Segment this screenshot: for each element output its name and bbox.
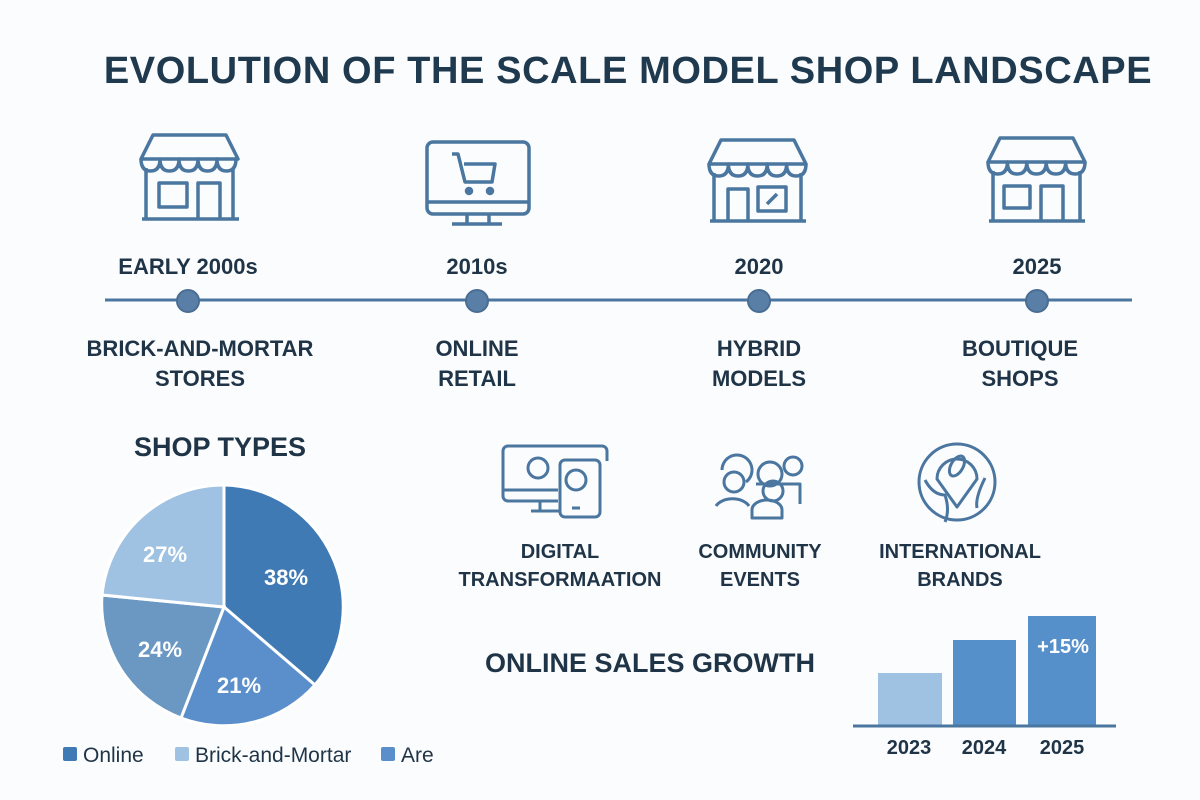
legend [63,744,434,767]
trend labels [458,541,661,591]
legend: Are [401,744,434,767]
text: ONLINE [435,336,519,361]
text: INTERNATIONAL [879,541,1041,563]
text: EVENTS [720,569,800,591]
text: RETAIL [438,366,516,391]
stage labels [87,336,313,391]
icon: store 2 [709,140,806,221]
pie chart [102,485,343,726]
text: MODELS [712,366,806,391]
bar chart: 2024 [962,737,1007,759]
text: SHOPS [981,366,1059,391]
stage labels: STORES [155,366,245,391]
timeline: 21% [217,673,261,698]
legend: Online [83,744,144,767]
text: 2020 [735,254,783,279]
timeline: 38% [264,565,308,590]
bar chart: +15% [1037,636,1089,658]
timeline line [105,290,1132,312]
timeline: 27% [143,542,187,567]
icon: community [716,455,802,518]
icon: store 3 [988,138,1085,221]
text: BOUTIQUE [962,336,1078,361]
stage labels: BRICK-AND-MORTAR [87,336,313,361]
bar heading: ONLINE SALES GROWTH [485,648,815,678]
bar chart: 2023 [887,737,931,759]
year labels: EARLY 2000s [118,254,258,279]
text: HYBRID [717,336,801,361]
pie heading: SHOP TYPES [134,432,306,462]
legend: Brick-and-Mortar [195,744,351,767]
trend labels: TRANSFORMAATION [459,569,661,591]
text: 2025 [1013,254,1061,279]
timeline: 24% [138,637,182,662]
icon: store 1 [141,135,239,219]
title: EVOLUTION OF THE SCALE MODEL SHOP LANDSCAPE [104,50,1152,92]
bar chart [853,616,1116,759]
icon: monitor cart [427,142,529,224]
text: BRANDS [917,569,1003,591]
icon: globe [919,444,995,522]
text: 2010s [446,254,508,279]
icon: digital [503,446,607,517]
bar chart: 2025 [1040,737,1084,759]
trend labels: DIGITAL [521,541,599,563]
text: COMMUNITY [698,541,822,563]
